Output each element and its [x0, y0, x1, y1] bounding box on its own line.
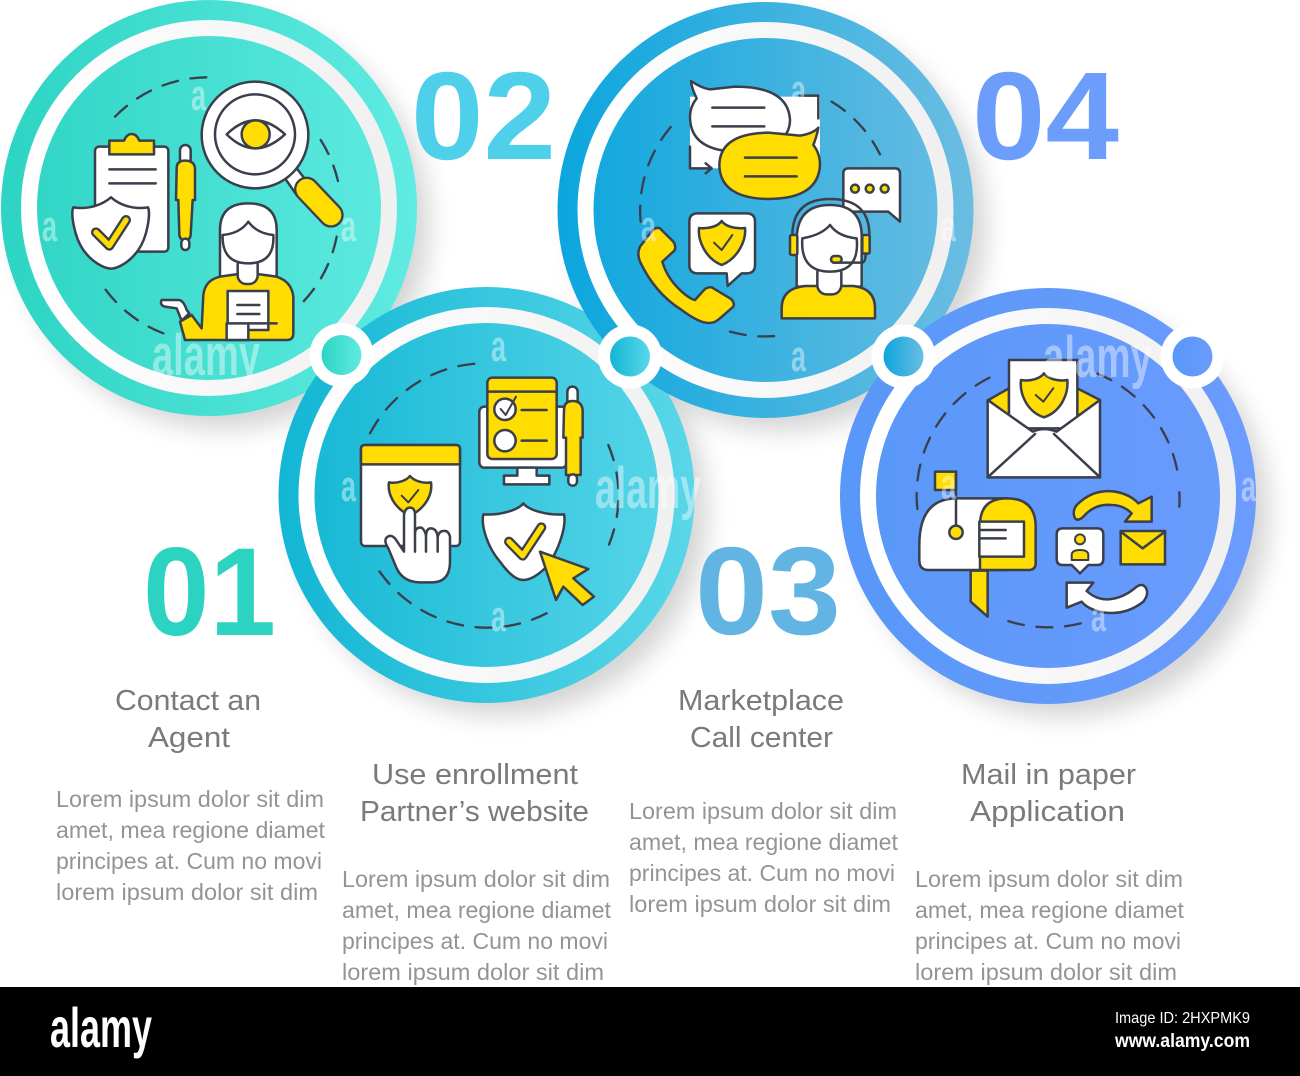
small watermark letters: a [941, 202, 956, 251]
heading: step 3: Call center [690, 722, 833, 754]
text block: step 2: lorem ipsum dolor sit dim [342, 959, 604, 985]
icon: website enrollment with shield and cursor [361, 363, 618, 628]
small watermark letters: a [1241, 462, 1256, 511]
small watermark letters: a [42, 202, 57, 251]
text block: step 4: lorem ipsum dolor sit dim [915, 959, 1177, 985]
panel: step 2 circle [278, 287, 701, 703]
small watermark letters: a [341, 202, 356, 251]
heading: step 2: Use enrollment [372, 759, 578, 791]
panel: step 4 circle [840, 288, 1256, 704]
text block: step 2 [342, 866, 612, 985]
small watermark letters: a [491, 322, 506, 371]
number 03: 03 [695, 522, 841, 661]
number 01: 01 [143, 523, 276, 662]
text block: step 4: amet, mea regione diamet [915, 897, 1185, 923]
icon: call center, speech bubbles and phone [638, 81, 900, 336]
small watermark letters: a [941, 460, 956, 509]
text block: step 1: principes at. Cum no movi [56, 848, 322, 874]
small watermark letters: a [641, 202, 656, 251]
text block: step 4: principes at. Cum no movi [915, 928, 1181, 954]
heading: step 1: Contact an [115, 685, 261, 717]
text block: step 3 [629, 798, 899, 917]
small watermark letters: a [791, 66, 806, 115]
footer url: www.alamy.com [1114, 1031, 1250, 1052]
circle drop shadows [19, 19, 1269, 717]
small watermark letters: a [791, 332, 806, 381]
footer logo: alamy [50, 996, 152, 1059]
footer bar [0, 987, 1300, 1076]
connector dot 2 [598, 324, 662, 388]
heading: step 4: Mail in paper [961, 759, 1136, 791]
heading: step 3 [678, 685, 844, 754]
icon: mail, mailbox and exchange arrows [917, 360, 1180, 627]
watermark: alamy [1043, 325, 1152, 390]
watermark: alamy [152, 323, 260, 388]
text block: step 1: Lorem ipsum dolor sit dim [56, 786, 324, 812]
heading: step 3: Marketplace [678, 685, 844, 717]
text block: step 4: Lorem ipsum dolor sit dim [915, 866, 1183, 892]
small watermark letters [42, 66, 1256, 641]
footer image id: Image ID: 2HXPMK9 [1115, 1010, 1250, 1027]
connector dot 4 [1160, 324, 1224, 388]
text block: step 3: lorem ipsum dolor sit dim [629, 891, 891, 917]
panel: step 3 circle [558, 2, 974, 418]
panel: step 1 circle [1, 0, 417, 416]
number 04: 04 [972, 47, 1119, 186]
text block: step 3: amet, mea regione diamet [629, 829, 899, 855]
small watermark letters: a [341, 462, 356, 511]
heading: step 4 [961, 759, 1136, 828]
icon: agent with clipboard, shield and magnifier [72, 77, 338, 340]
watermark: alamy [595, 456, 701, 521]
small watermark letters: a [491, 592, 506, 641]
heading: step 4: Application [970, 796, 1125, 828]
text block: step 1 [56, 786, 326, 905]
text block: step 3: principes at. Cum no movi [629, 860, 895, 886]
heading: step 2: Partner’s website [360, 796, 589, 828]
heading: step 1 [115, 685, 261, 754]
text block: step 3: Lorem ipsum dolor sit dim [629, 798, 897, 824]
text block: step 4 [915, 866, 1185, 985]
small watermark letters: a [191, 71, 206, 120]
text block: step 2: Lorem ipsum dolor sit dim [342, 866, 610, 892]
text block: step 1: amet, mea regione diamet [56, 817, 326, 843]
text block: step 2: principes at. Cum no movi [342, 928, 608, 954]
text block: step 1: lorem ipsum dolor sit dim [56, 879, 318, 905]
connector dot 1 [310, 323, 374, 387]
heading: step 2 [360, 759, 589, 828]
text block: step 2: amet, mea regione diamet [342, 897, 612, 923]
small watermark letters: a [1091, 592, 1106, 641]
heading: step 1: Agent [148, 722, 230, 754]
connector dot 3 [872, 324, 936, 388]
number 02: 02 [411, 47, 556, 186]
